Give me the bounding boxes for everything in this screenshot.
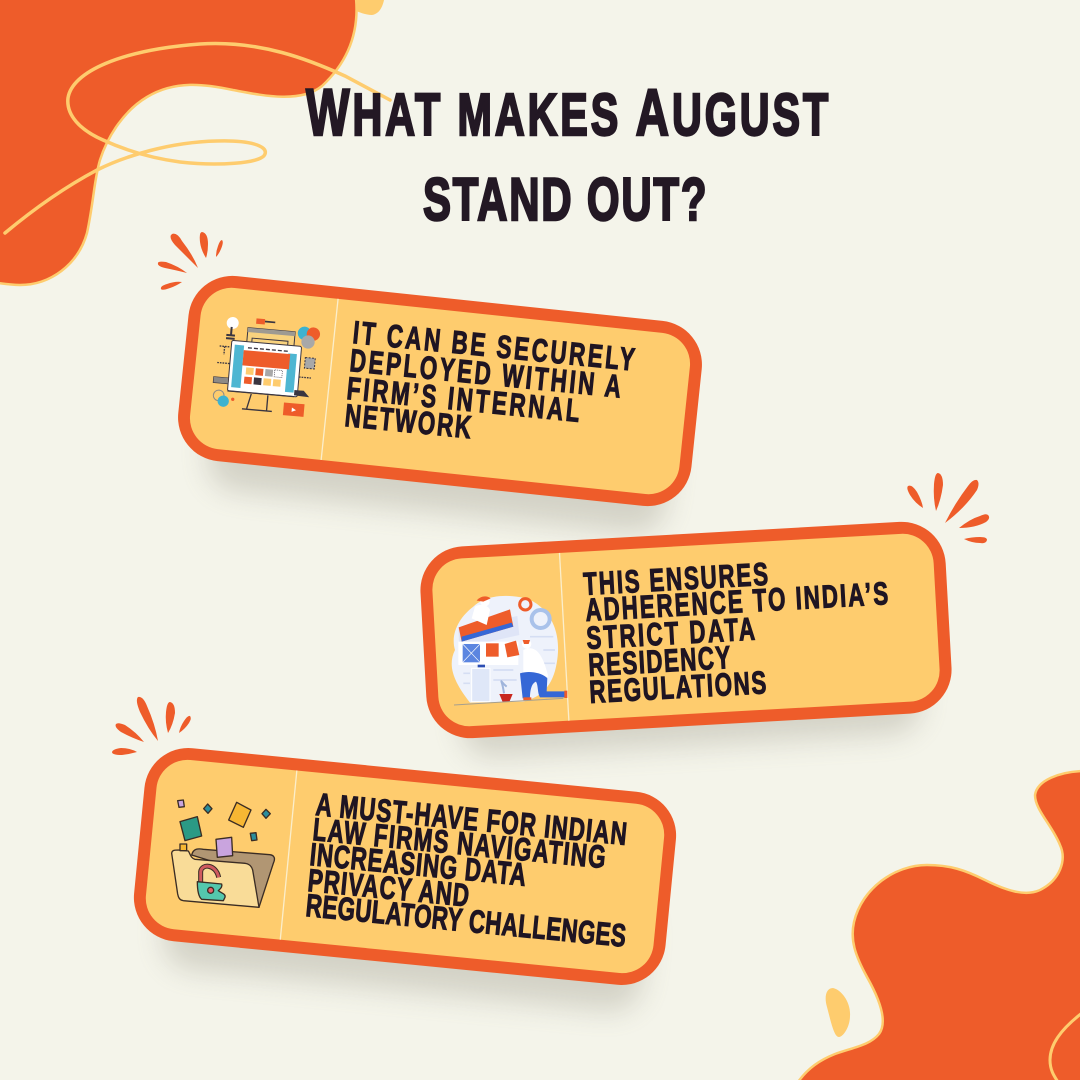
text: card 2: REGULATIONS (588, 664, 767, 710)
panel: card 2 (418, 519, 954, 741)
sparks: card 1 (158, 232, 223, 290)
text: card 2 (582, 556, 889, 710)
text: card 2: STRICT DATA (585, 611, 756, 656)
decorative blob: bottom right (798, 771, 1080, 1080)
icon: unlocked folder (172, 800, 274, 907)
text: card 3: PRIVACY AND (306, 862, 471, 913)
icon: designers arranging layouts (452, 596, 567, 705)
panel: card 1 (174, 272, 706, 510)
text: card 2: THIS ENSURES (582, 556, 769, 602)
sparks: card 2 (907, 473, 989, 543)
text: card 1: NETWORK (343, 397, 473, 445)
text: card 2: ADHERENCE TO INDIA’S (584, 575, 889, 628)
decorative blob: top left (0, 0, 390, 285)
text: card 3 (304, 786, 629, 954)
text: card 3: LAW FIRMS NAVIGATING (311, 811, 607, 875)
text: card 1 (343, 314, 636, 445)
text: card 1: IT CAN BE SECURELY (351, 314, 636, 378)
panel: card 3 (130, 744, 680, 989)
sparks: card 3 (112, 697, 191, 755)
text: card 1: FIRM’S INTERNAL (345, 370, 582, 429)
title: STAND OUT? (423, 166, 706, 233)
card shadows (161, 368, 922, 1013)
text: card 2: RESIDENCY (587, 639, 731, 683)
text: card 3: INCREASING DATA (308, 836, 528, 893)
icon: web design monitor (211, 315, 321, 418)
text: card 3: REGULATORY CHALLENGES (304, 887, 628, 954)
text: card 3: A MUST-HAVE FOR INDIAN (314, 786, 629, 852)
text: card 1: DEPLOYED WITHIN A (348, 342, 623, 404)
title (306, 76, 828, 233)
title: WHAT MAKES AUGUST (306, 76, 828, 150)
